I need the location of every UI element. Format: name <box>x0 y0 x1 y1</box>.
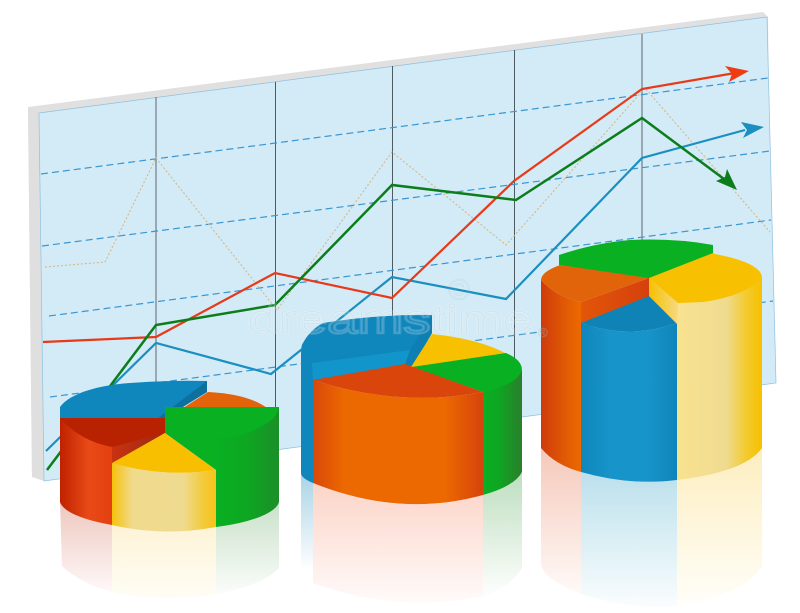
left pie: blue slice edge <box>158 381 207 418</box>
middle pie: blue slice edge <box>405 315 432 366</box>
watermark: © <box>448 274 470 307</box>
right pie: yellow slice wall <box>649 278 678 324</box>
right pie: yellow slice side <box>677 278 762 480</box>
right pie: orange slice side <box>541 280 581 472</box>
left pie: red slice inner wall <box>112 418 165 464</box>
left pie: yellow slice side <box>112 463 216 532</box>
dotted beige line <box>45 88 770 310</box>
reflection: left pie <box>60 502 279 599</box>
board frame <box>28 12 772 481</box>
right pie: green slice top <box>559 240 713 279</box>
reflection: right pie <box>541 448 762 607</box>
left pie: blue slice top <box>60 381 207 418</box>
middle pie: blue slice lower band <box>312 350 410 381</box>
middle pie: orange slice side <box>313 380 483 504</box>
middle pie: green slice top <box>412 353 522 392</box>
right pie: blue slice top <box>581 296 677 332</box>
left pie: green slice side <box>165 407 279 527</box>
green trend line with arrow <box>47 118 737 470</box>
watermark: ® <box>538 325 548 340</box>
pie chart: left <box>60 381 279 532</box>
board panel <box>39 17 776 481</box>
right pie: orange slice wall <box>581 278 650 324</box>
middle pie: green slice side <box>483 370 522 495</box>
left pie: yellow slice top <box>112 433 216 473</box>
left pie: red slice top <box>60 418 165 447</box>
middle pie: yellow slice top <box>411 334 507 368</box>
left pie: green slice top <box>165 407 279 438</box>
pie chart: middle <box>301 315 522 504</box>
right pie: orange slice top <box>541 265 649 302</box>
middle pie: blue slice <box>301 315 432 483</box>
left pie: red slice side <box>60 418 112 525</box>
vertical grid lines <box>156 34 642 410</box>
watermark <box>248 274 548 342</box>
watermark: dreamstime <box>248 298 534 342</box>
left pie: orange slice top <box>183 392 267 408</box>
watermark: dreamstime <box>248 298 534 342</box>
pie chart: right <box>541 240 762 482</box>
right pie: yellow slice top <box>649 253 762 303</box>
reflection: middle pie <box>301 472 522 603</box>
red trend line with arrow <box>43 66 749 342</box>
middle pie: orange slice top <box>313 364 483 398</box>
dashed horizontal grid lines <box>41 78 773 397</box>
blue trend line with arrow <box>46 122 764 451</box>
right pie: blue slice side <box>581 323 677 482</box>
